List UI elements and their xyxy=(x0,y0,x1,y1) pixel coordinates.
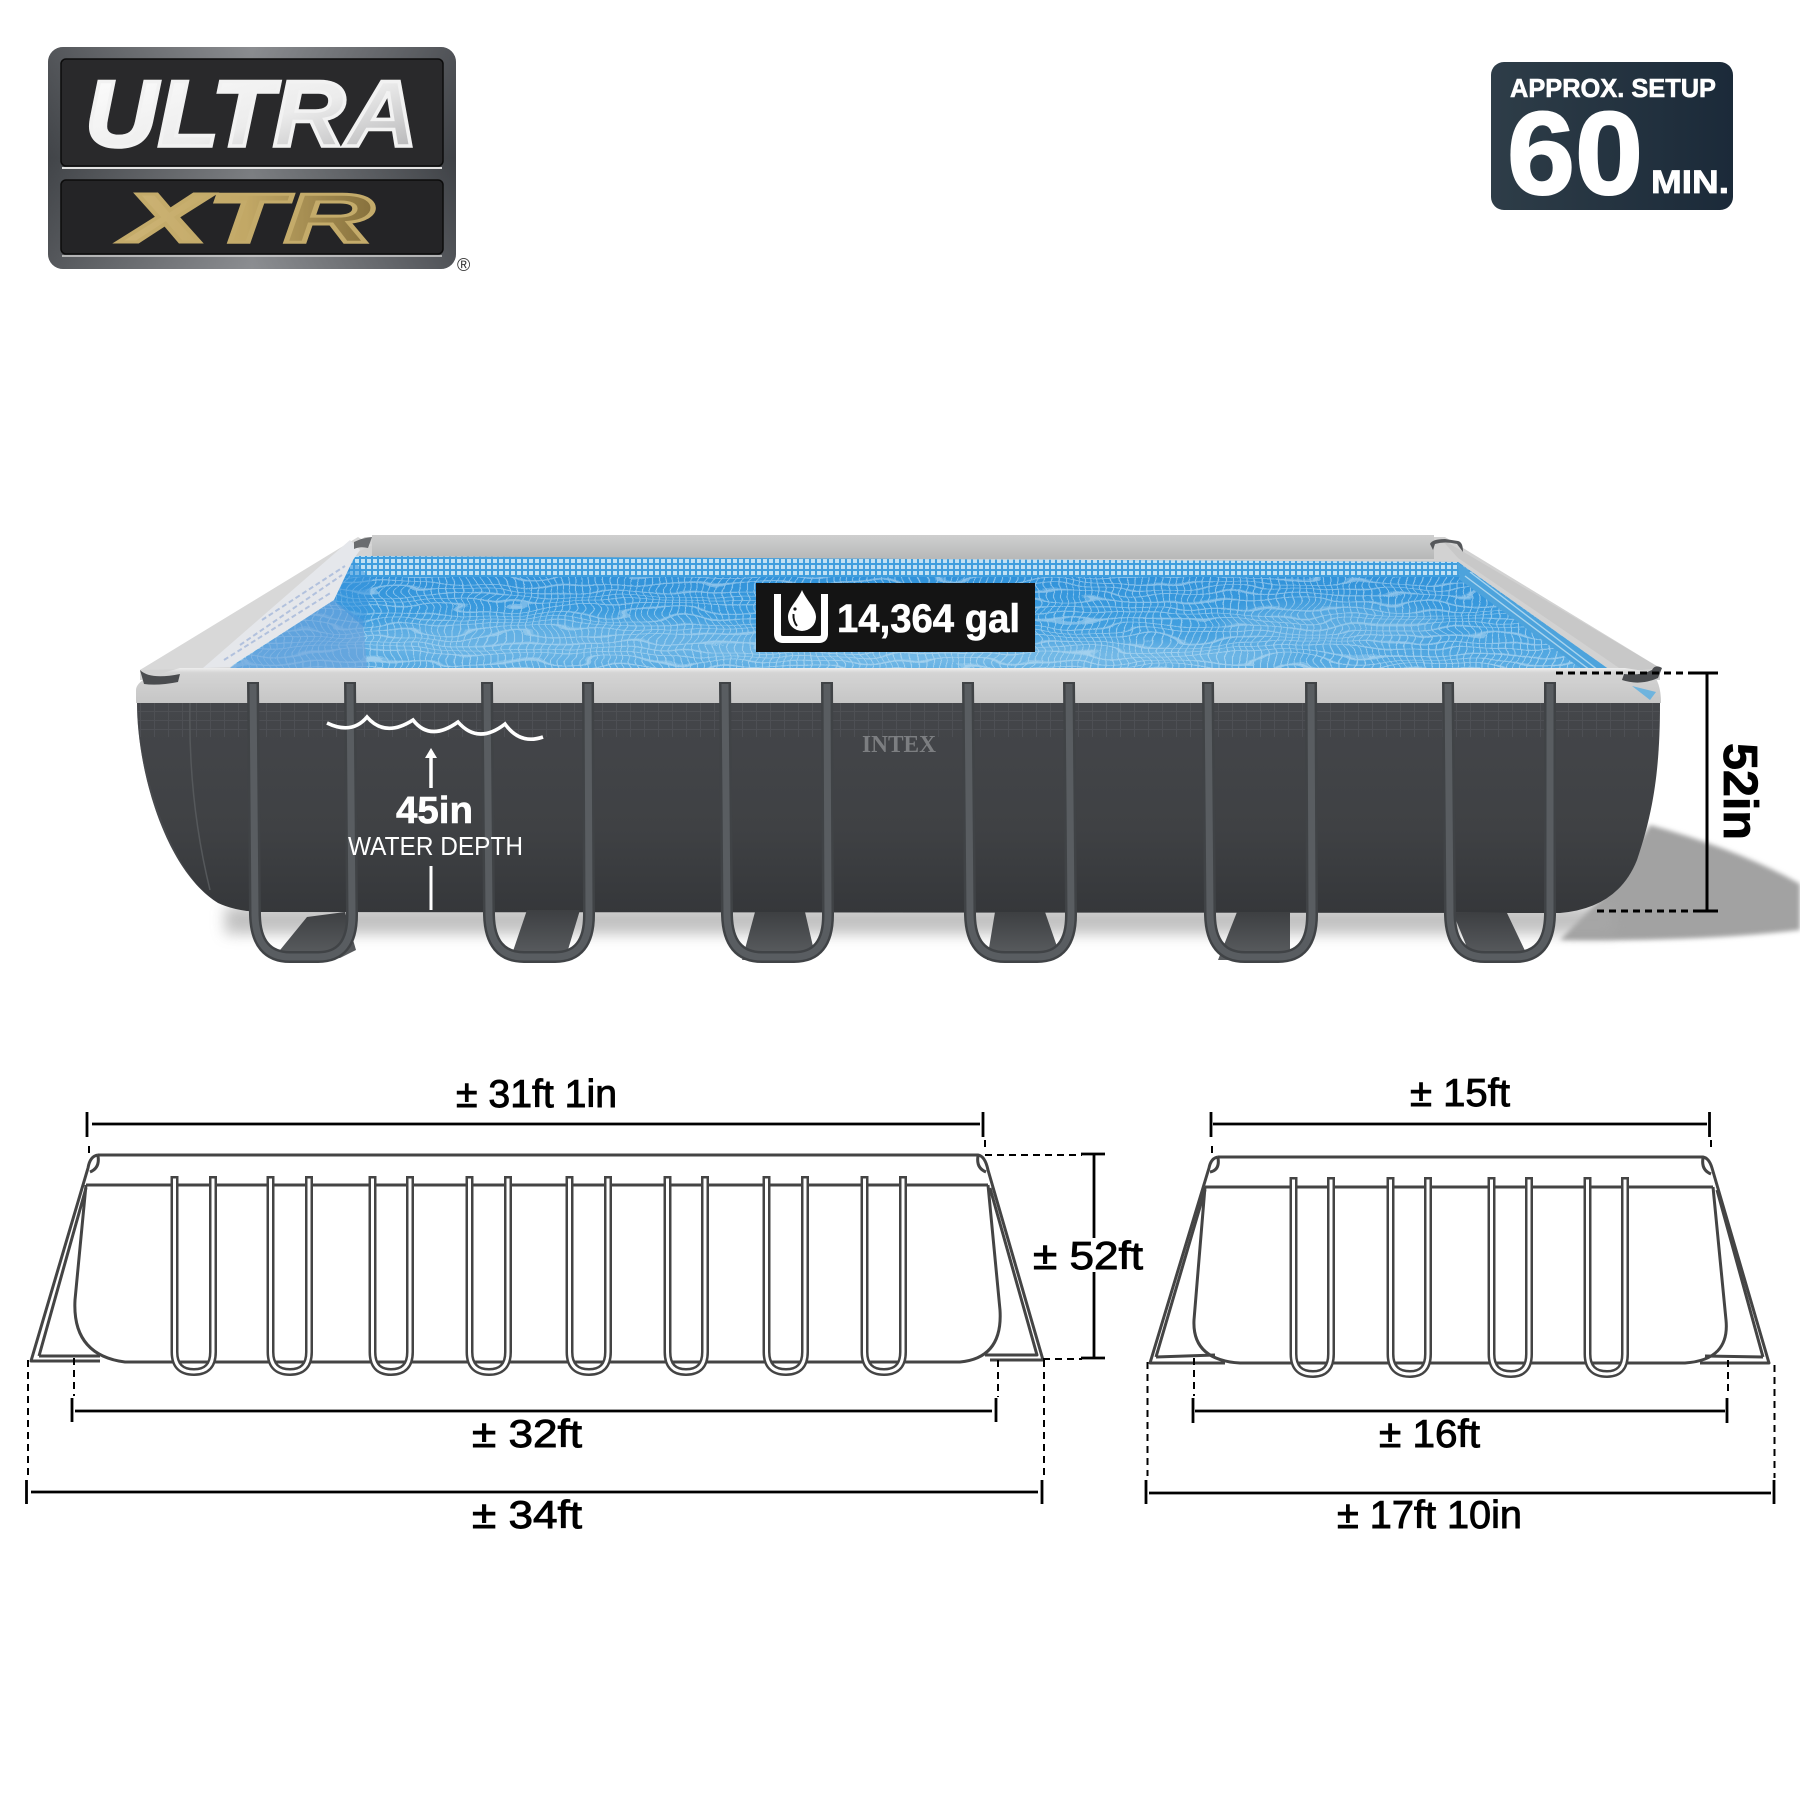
diagram: long side: ± 31ft 1in xyxy=(456,1073,617,1116)
diagram: long side: ± 52ft xyxy=(1033,1235,1143,1278)
water depth annotation: 45in xyxy=(396,790,473,832)
setup time badge: MIN. xyxy=(1651,164,1729,200)
diagram: short side: ± 17ft 10in xyxy=(1337,1494,1522,1537)
water surface xyxy=(230,556,1607,668)
frame outline xyxy=(31,1155,1043,1362)
diagram: short side: ± 15ft xyxy=(1410,1072,1510,1115)
icon: water line xyxy=(327,717,543,739)
logo: Ultra XTR: XTR xyxy=(117,179,375,257)
support legs xyxy=(253,682,1550,957)
diagram: short side xyxy=(1146,1072,1774,1537)
water depth annotation: WATER DEPTH xyxy=(348,831,523,861)
ladder legs xyxy=(174,1176,903,1372)
corner handles xyxy=(354,537,372,549)
setup time badge xyxy=(1491,62,1733,220)
ground shadow xyxy=(225,825,1800,940)
frame outline xyxy=(1150,1157,1769,1363)
diagram: short side: ± 16ft xyxy=(1379,1413,1480,1456)
guide dashes xyxy=(1148,1140,1774,1478)
diagram: long side: ± 32ft xyxy=(472,1413,582,1456)
ladder legs xyxy=(1294,1177,1625,1374)
logo: Ultra XTR xyxy=(48,47,470,275)
dimension lines xyxy=(1146,1112,1774,1504)
icon: water drop in basin xyxy=(778,590,824,640)
arrow up xyxy=(425,748,437,788)
pool height dimension: 52in xyxy=(1713,743,1766,840)
support feet xyxy=(276,910,1527,962)
setup time badge: APPROX. SETUP xyxy=(1510,73,1716,103)
water capacity label xyxy=(756,583,1035,652)
INTEX wordmark: INTEX xyxy=(862,732,937,758)
guide dashes xyxy=(28,1140,1082,1478)
dimension lines xyxy=(26,1112,1042,1504)
pool wall xyxy=(137,703,1660,913)
logo: Ultra XTR: ® xyxy=(457,255,470,275)
right rim xyxy=(1440,538,1660,672)
left rim xyxy=(140,537,372,670)
pool photo xyxy=(130,535,1662,962)
pool top rim xyxy=(140,537,1660,680)
wall mesh texture xyxy=(130,703,1662,906)
setup time badge: 60 xyxy=(1507,88,1643,220)
diagram: long side xyxy=(26,1073,1143,1537)
back rim xyxy=(372,535,1434,559)
pool height dimension xyxy=(1556,673,1766,911)
diagram: long side: ± 34ft xyxy=(472,1494,582,1537)
left liner fold xyxy=(203,540,360,668)
logo: Ultra XTR: ULTRA xyxy=(85,61,418,166)
front corners xyxy=(140,670,180,685)
water depth annotation xyxy=(327,717,543,910)
water capacity label: 14,364 gal xyxy=(837,597,1020,641)
front rim xyxy=(136,668,1661,703)
